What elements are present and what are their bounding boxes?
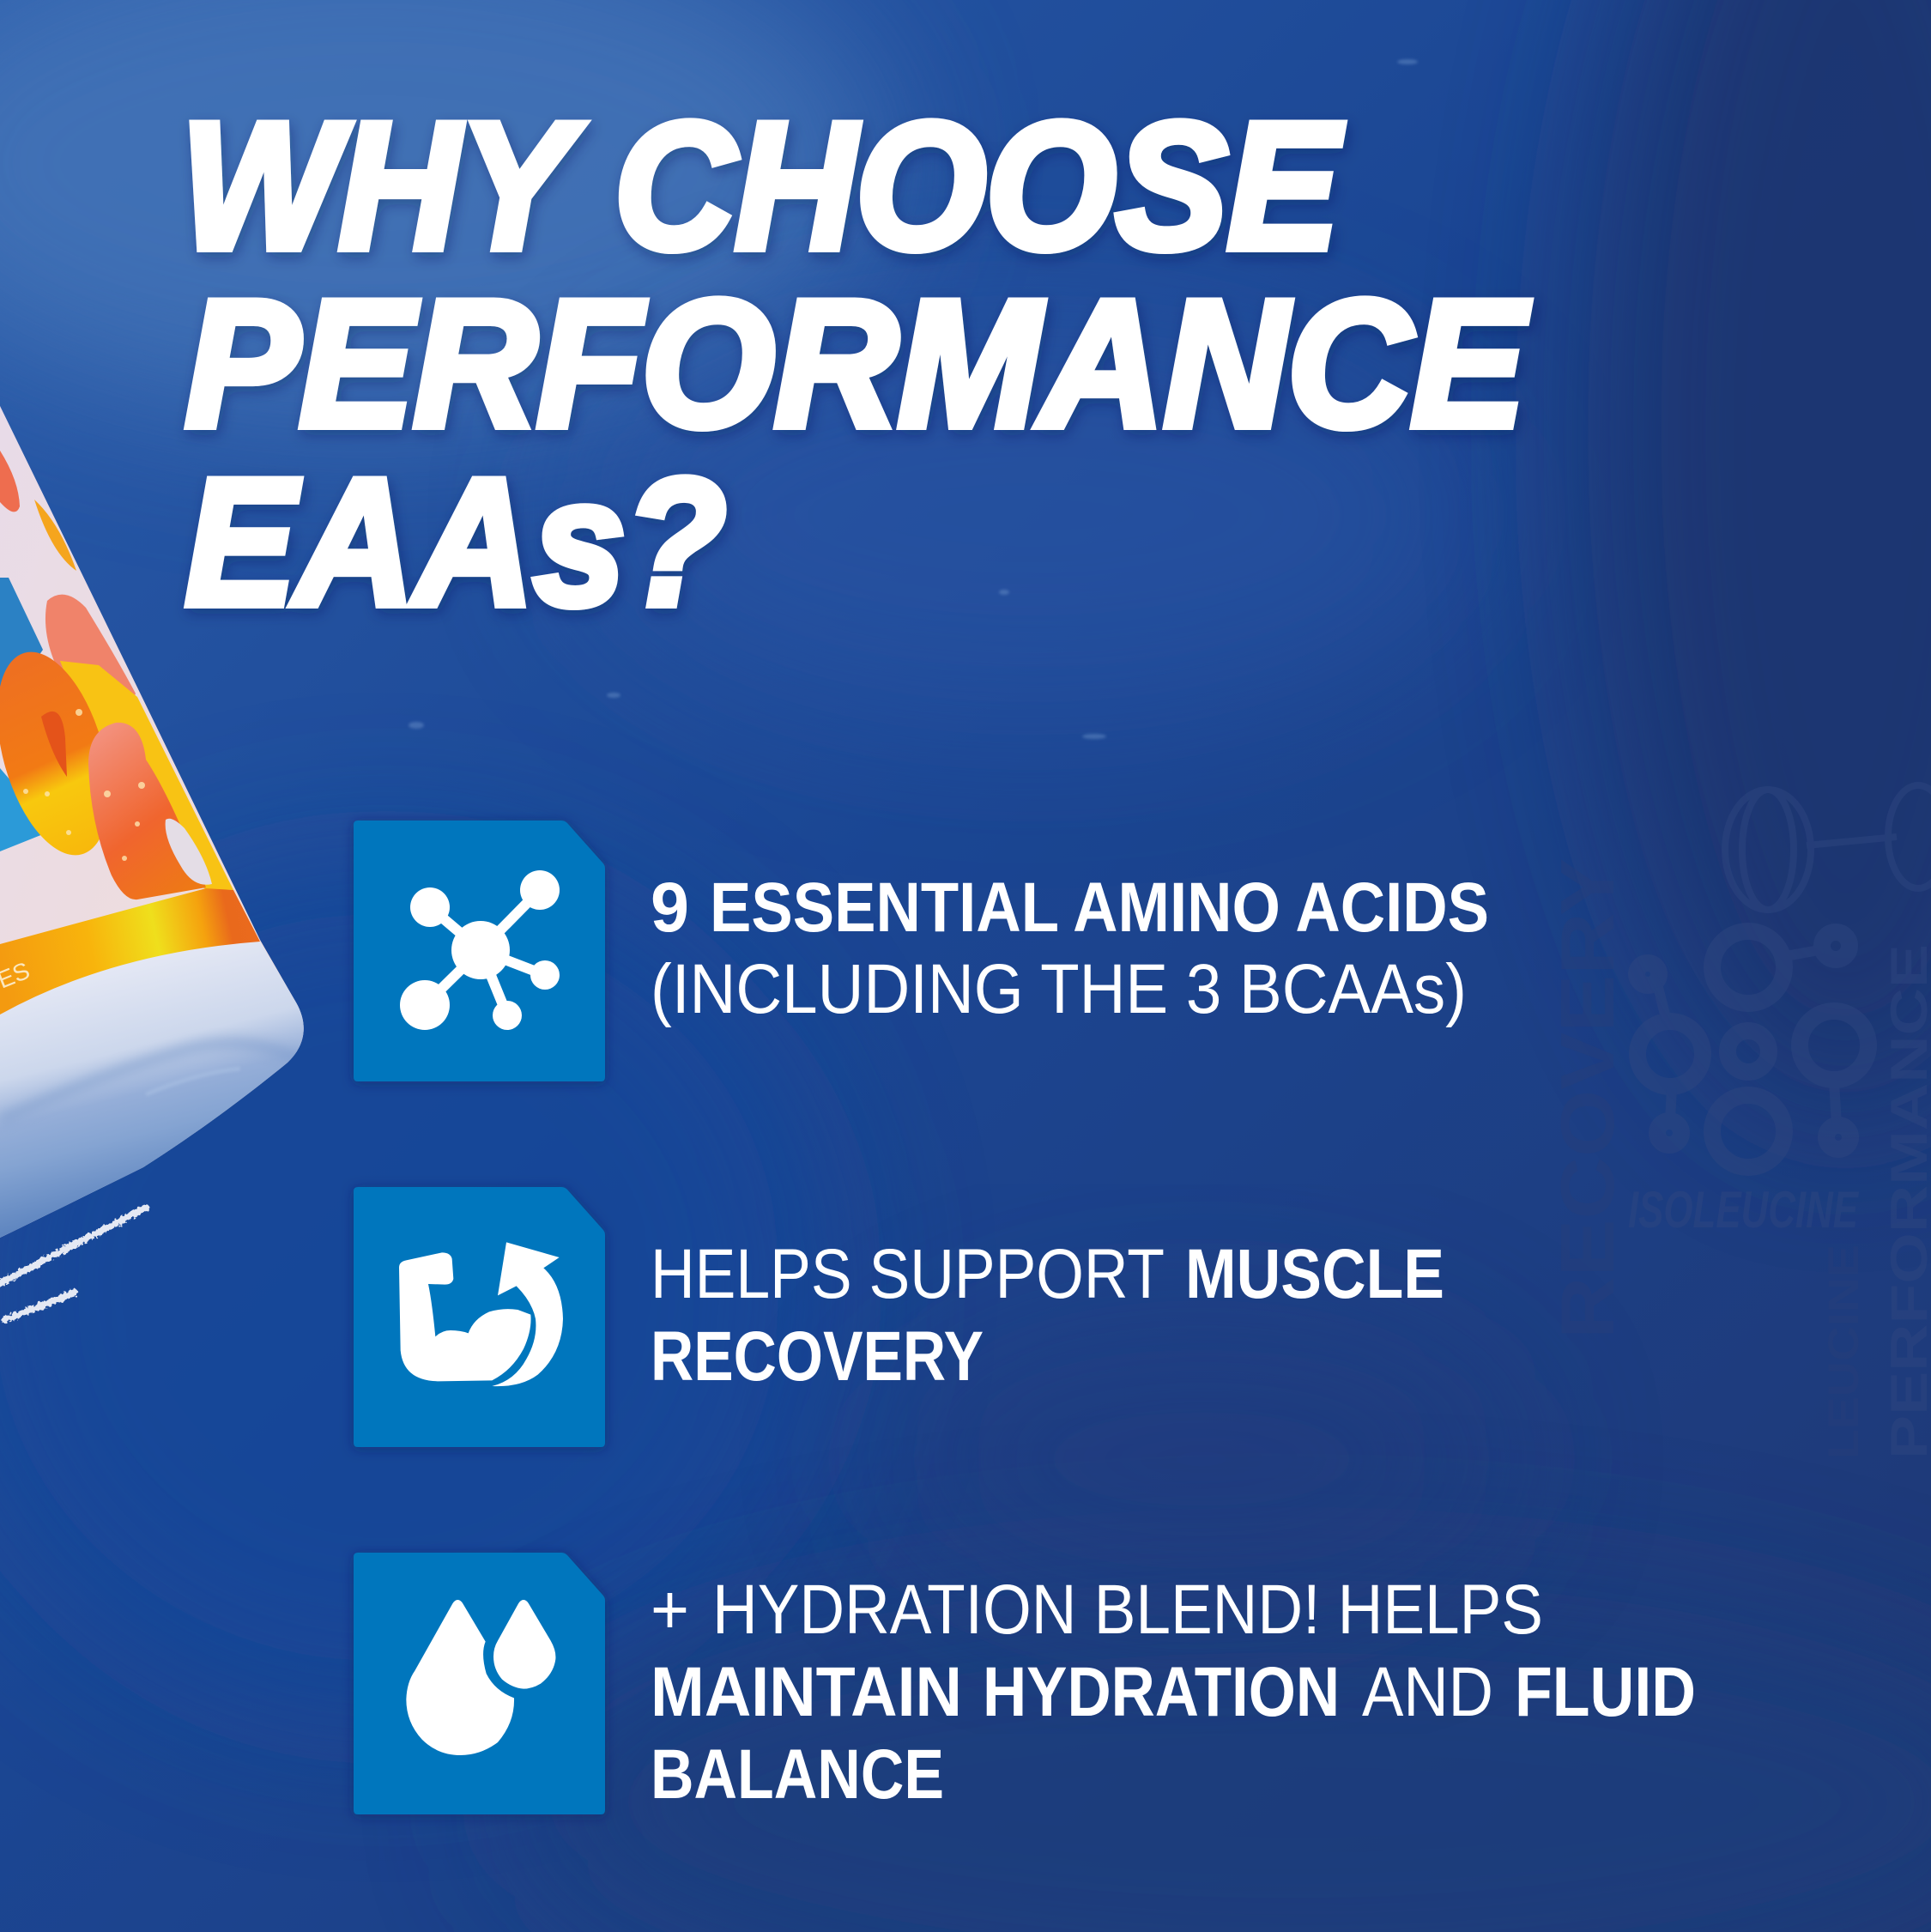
blue label panel	[0, 578, 43, 730]
gummy back	[45, 595, 136, 712]
watermark: words: LEUCINE	[1819, 1245, 1867, 1459]
gummy streak	[34, 500, 76, 571]
text: hydration: BALANCE	[651, 1735, 944, 1814]
text: hydration: HYDRATION BLEND! HELPS	[712, 1571, 1543, 1649]
icon tile: water drops	[354, 1553, 605, 1814]
sparkle streaks	[0, 1208, 146, 1320]
text: hydration: FLUID	[1515, 1653, 1696, 1731]
feature 1	[354, 821, 1489, 1081]
watermark: words	[1545, 858, 1931, 1459]
text: amino acids: (INCLUDING THE 3 BCAAs)	[651, 950, 1467, 1028]
icon tile: muscle recovery	[354, 1187, 605, 1447]
title: WHY CHOOSE	[181, 85, 1343, 287]
text: amino acids	[651, 869, 1489, 1028]
watermark: dumbbell	[1725, 785, 1931, 910]
gummy sugar specks	[23, 709, 145, 861]
text: hydration: AND	[1362, 1653, 1493, 1731]
text: hydration: MAINTAIN	[651, 1653, 962, 1731]
title	[181, 85, 1530, 643]
text: hydration: +	[651, 1571, 689, 1649]
watermark pattern	[1545, 785, 1931, 1459]
feature 3	[354, 1553, 1696, 1814]
title: PERFORMANCE	[185, 263, 1530, 464]
orange label band	[0, 888, 260, 1014]
tub base	[0, 942, 304, 1238]
text: muscle recovery: RECOVERY	[651, 1317, 984, 1396]
gummy ring front	[0, 639, 130, 868]
gummy ring peach	[88, 723, 206, 899]
icon tile: molecule	[354, 821, 605, 1081]
text: muscle recovery	[651, 1235, 1444, 1396]
product tub	[0, 406, 304, 1320]
text: amino acids: 9	[651, 869, 689, 947]
text: hydration: HYDRATION	[983, 1653, 1340, 1731]
text: muscle recovery: MUSCLE	[1185, 1235, 1444, 1313]
gummy top	[0, 451, 20, 512]
watermark: molecule	[1637, 931, 1868, 1167]
text: muscle recovery: HELPS SUPPORT	[651, 1235, 1165, 1313]
tub body and label	[0, 406, 304, 1238]
text: hydration	[651, 1571, 1696, 1814]
watermark: words: RECOVERY	[1545, 858, 1630, 1339]
feature 2	[354, 1187, 1444, 1447]
title: EAAs?	[185, 441, 726, 643]
text: amino acids: ESSENTIAL AMINO ACIDS	[710, 869, 1489, 947]
